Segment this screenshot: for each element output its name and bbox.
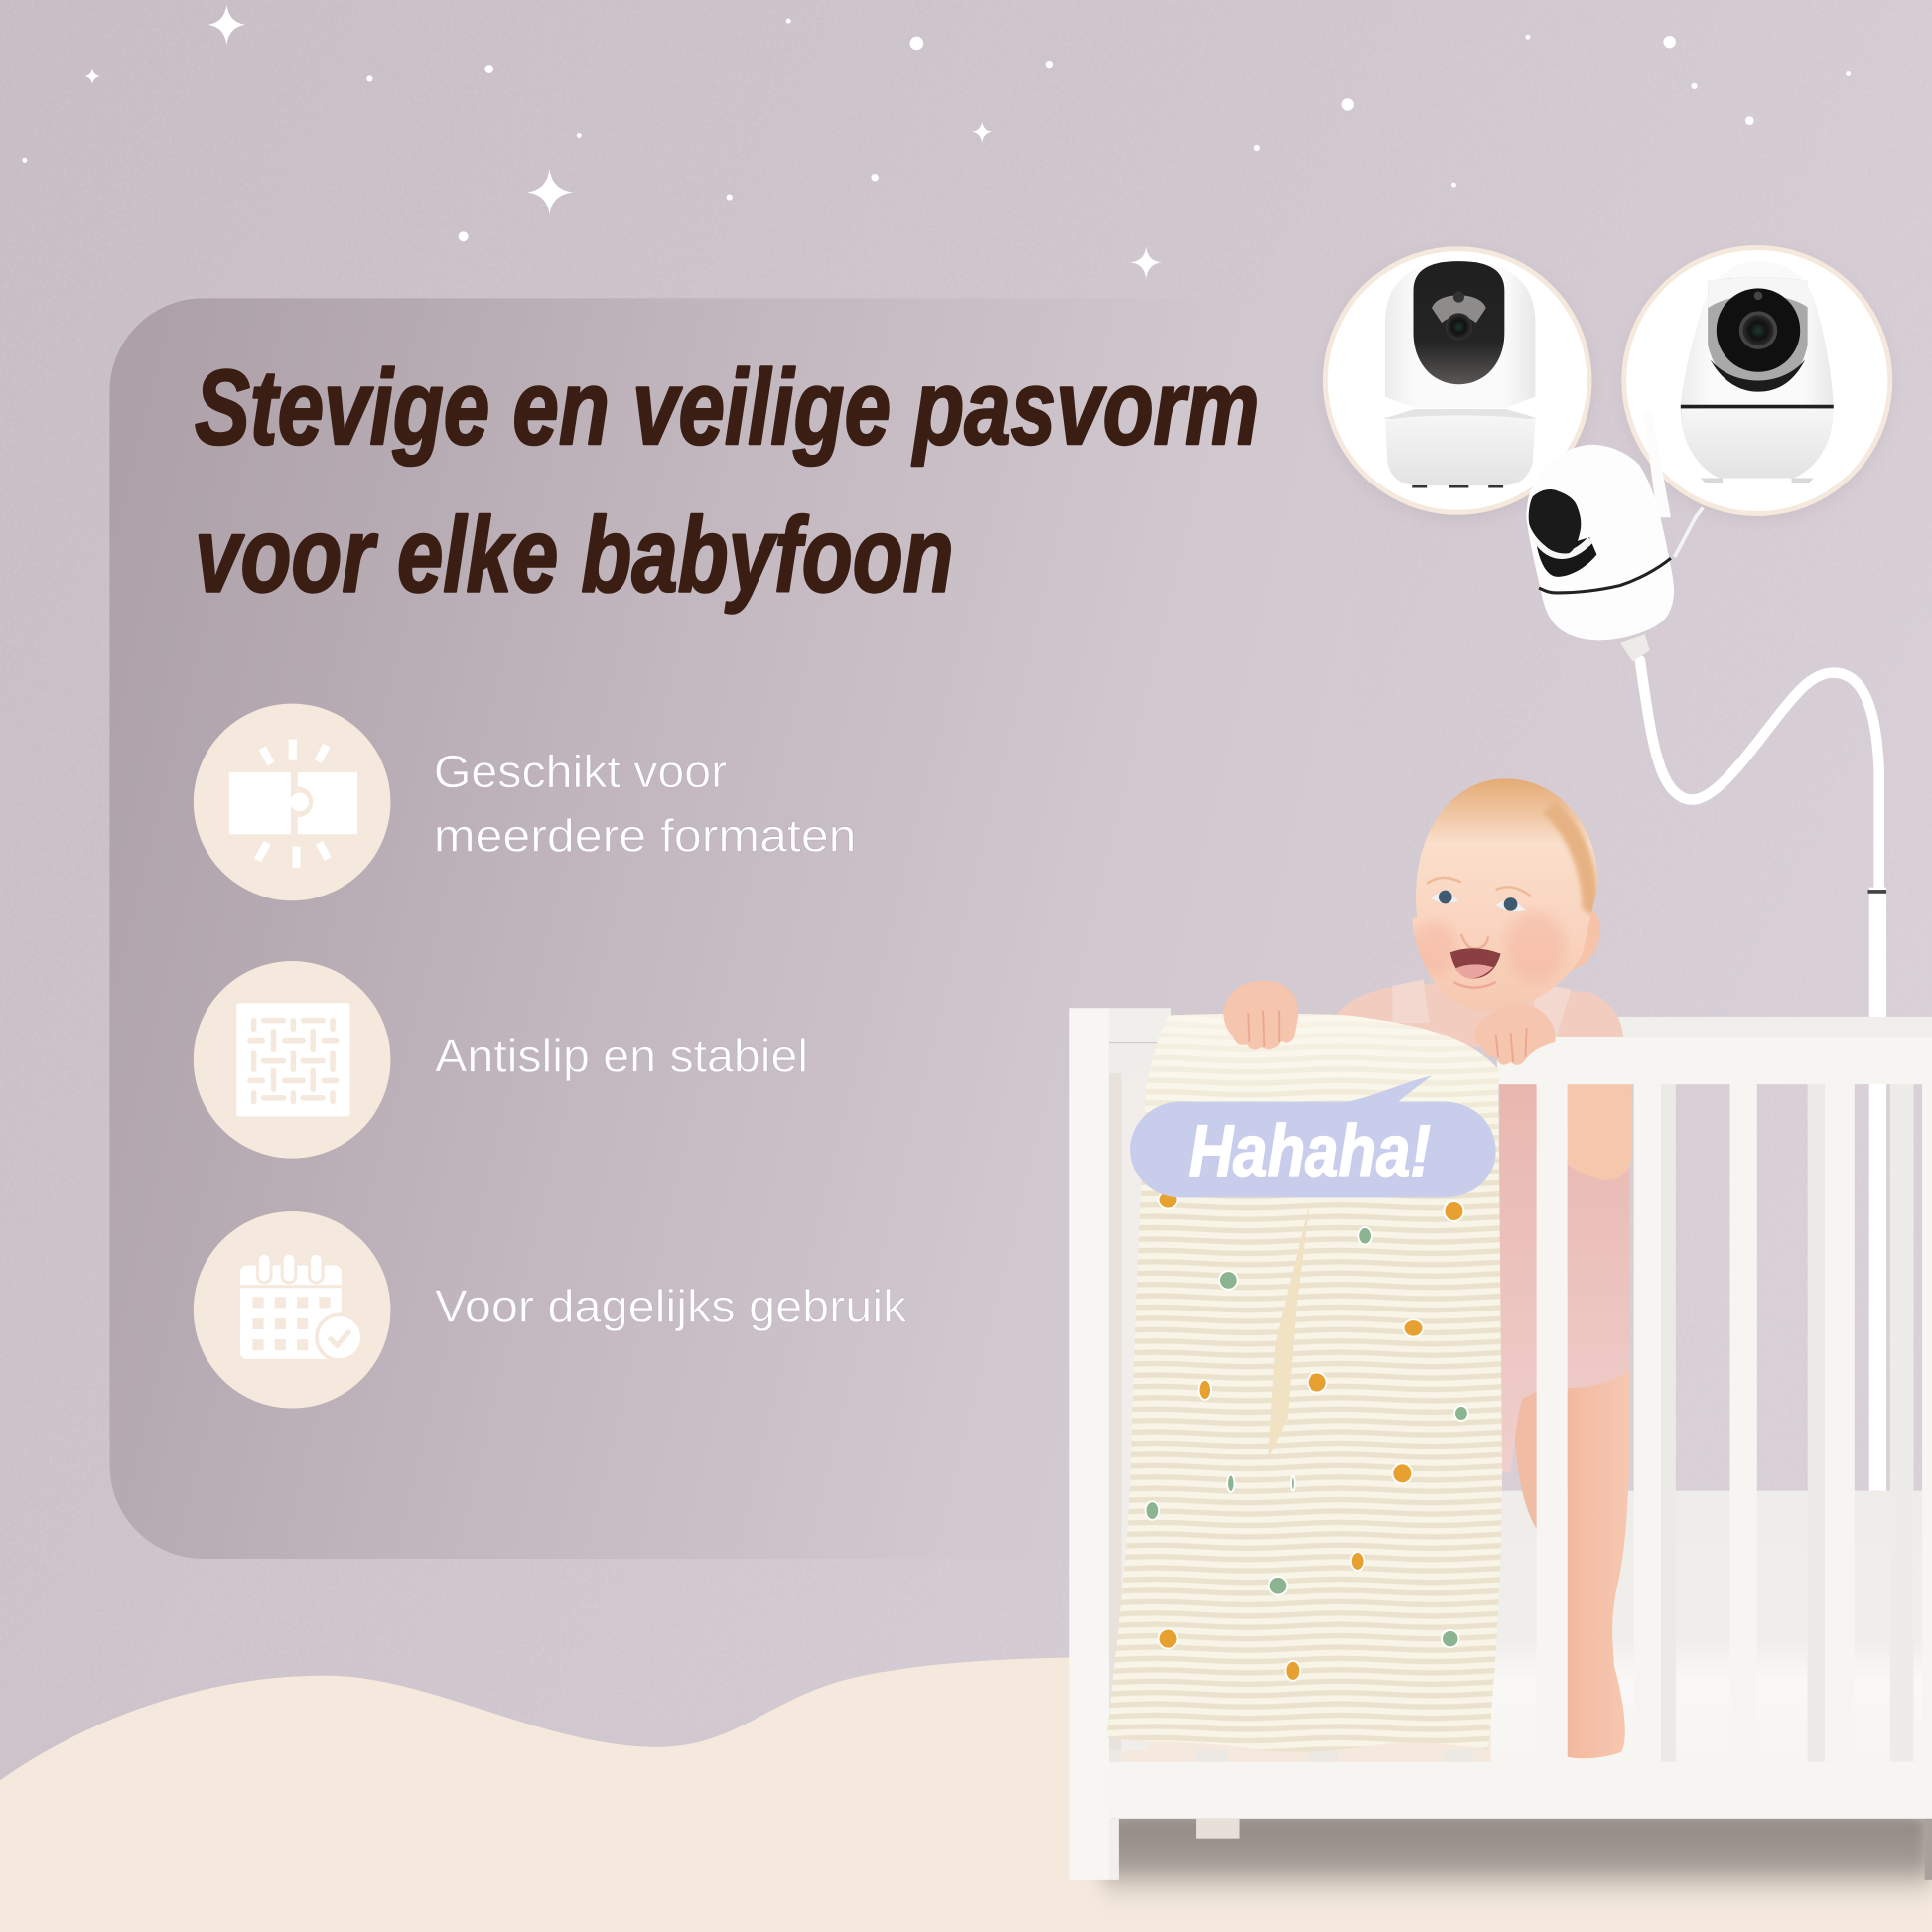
icon: puzzle pieces — [194, 704, 390, 900]
baby head — [1412, 778, 1600, 1011]
icon: anti-slip mat — [194, 961, 390, 1159]
antenna and strap — [1644, 410, 1671, 517]
baby far leg — [1513, 1386, 1540, 1534]
crib frame — [1069, 1008, 1932, 1880]
feature 1: multiple formats — [194, 704, 857, 900]
baby near leg — [1568, 1368, 1630, 1758]
camera lens — [1529, 489, 1581, 553]
cream floor wave — [0, 1657, 1932, 1932]
speech bubble — [1130, 1075, 1496, 1197]
camera capsule — [1526, 445, 1674, 640]
feature 3: daily use — [194, 1211, 908, 1409]
text: suitable for formats — [434, 746, 857, 862]
text: anti-slip and stable: Antislip en stabiel — [435, 1031, 808, 1082]
feature 2: anti-slip — [194, 961, 808, 1159]
icon: calendar with check — [194, 1211, 390, 1409]
text: suitable for formats: Geschikt voor — [434, 746, 727, 797]
camera mount pole and cable — [1640, 660, 1886, 1491]
main camera on mount — [1526, 410, 1703, 661]
circle soft shadows — [1324, 252, 1890, 518]
text: for daily use: Voor dagelijks gebruik — [435, 1281, 908, 1332]
camera connector — [1620, 634, 1650, 661]
camera lower housing — [1537, 537, 1596, 577]
baby — [1337, 778, 1631, 1758]
info panel — [109, 298, 1355, 1559]
crib back and mattress — [1109, 1008, 1932, 1762]
sparkles and stars — [22, 5, 1851, 312]
blanket with dots — [1106, 1014, 1502, 1752]
baby arm — [1568, 1072, 1631, 1180]
camera band — [1539, 558, 1671, 593]
baby hands — [1223, 981, 1556, 1065]
product circle: camera two — [1624, 247, 1890, 514]
baby dress — [1499, 1072, 1630, 1472]
speech bubble: Hahaha! — [1189, 1110, 1431, 1192]
product circle: camera one — [1325, 249, 1589, 512]
crib floor shadow — [1103, 1811, 1932, 1912]
baby shoulders and top — [1337, 983, 1624, 1047]
title: Stevige en veilige pasvorm — [195, 347, 1259, 467]
camera white ring — [1535, 537, 1590, 555]
text: suitable for formats: meerdere formaten — [434, 810, 857, 862]
title: voor elke babyfoon — [195, 495, 954, 615]
title — [195, 347, 1259, 615]
